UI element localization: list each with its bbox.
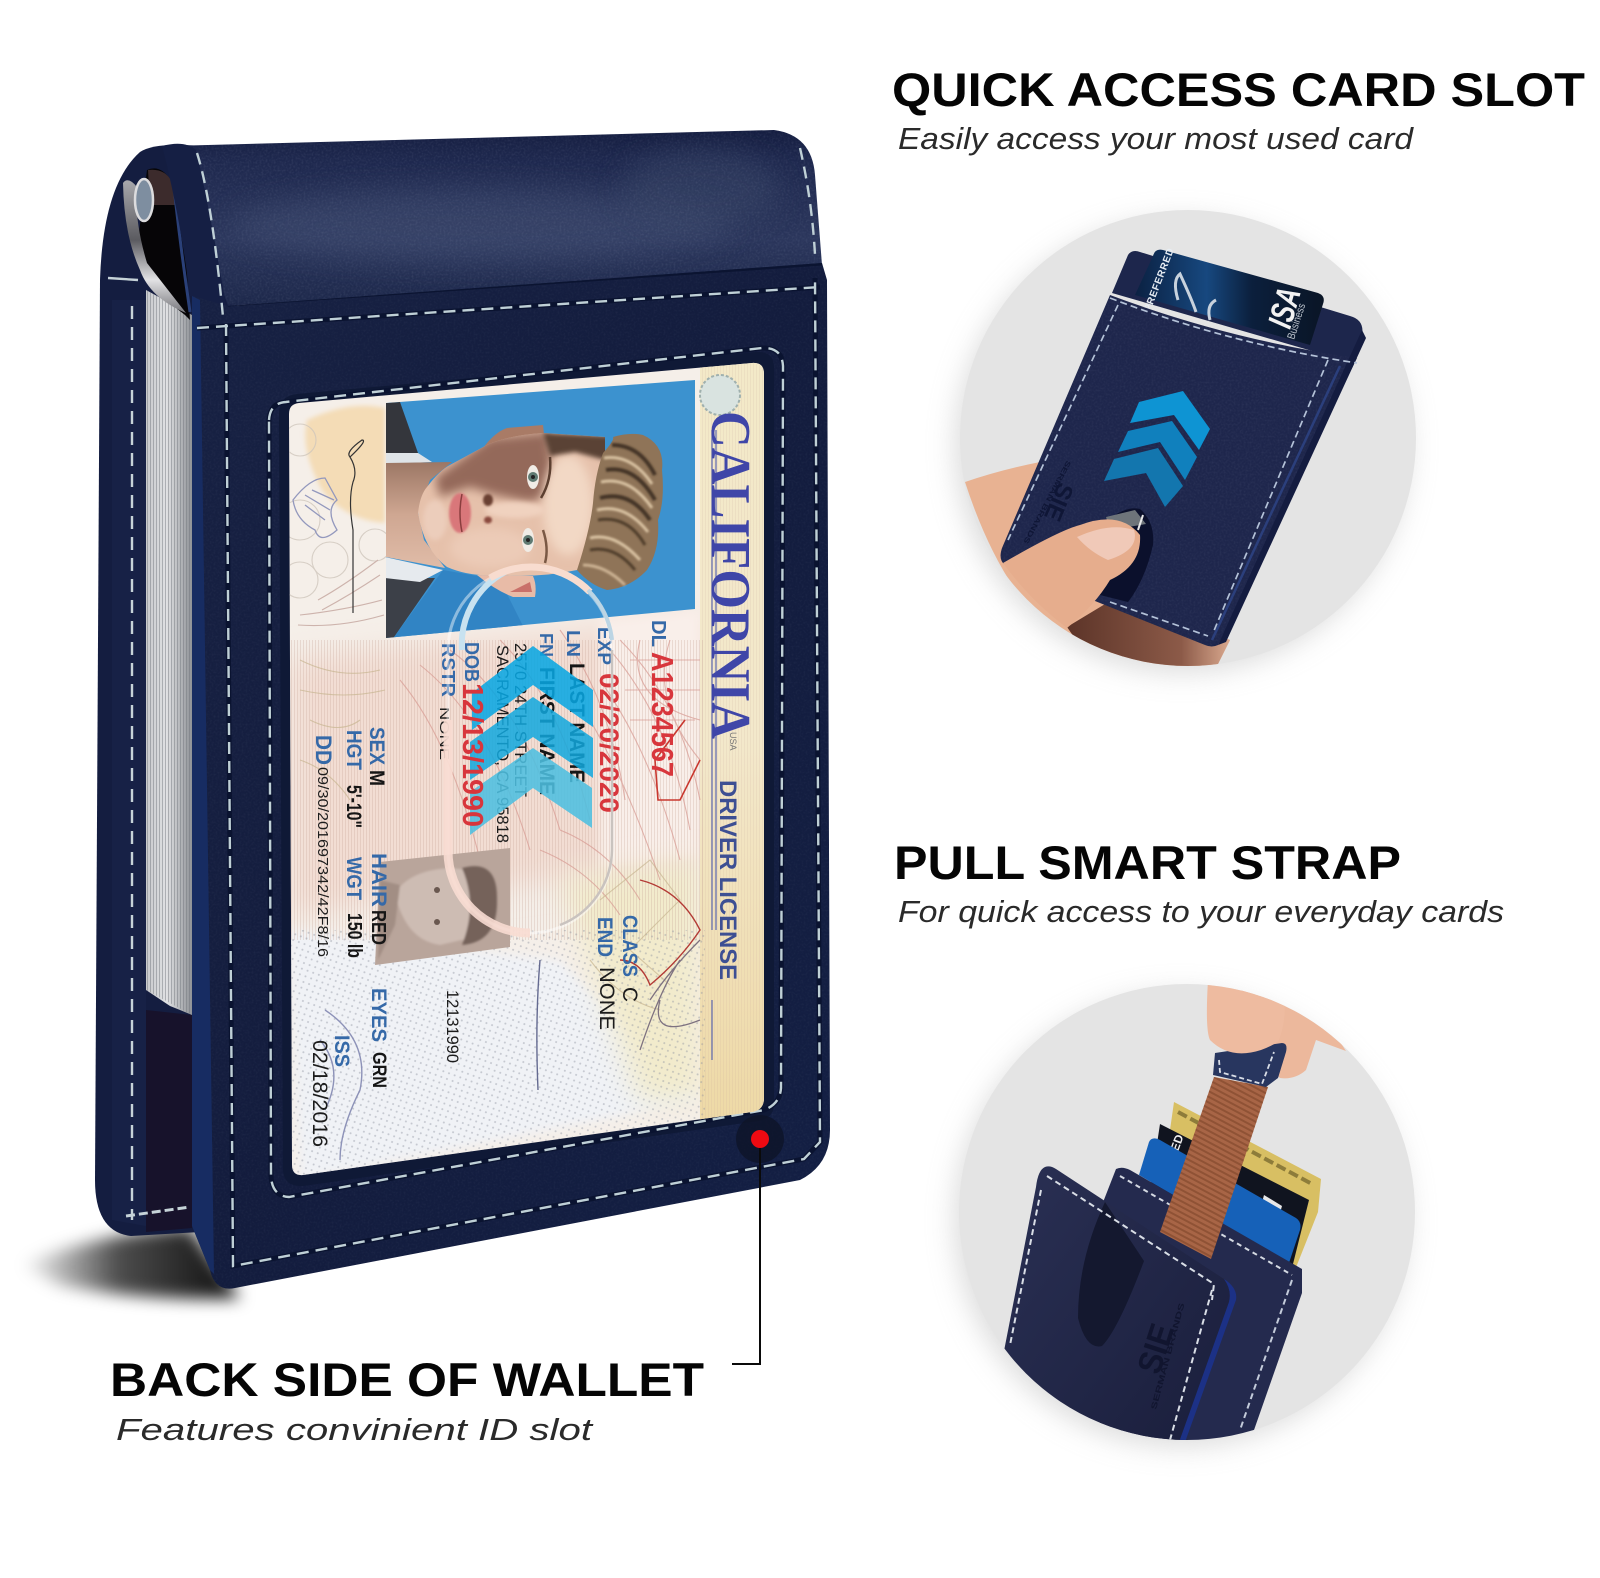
card printed text: GRN (368, 1052, 389, 1088)
card printed text: HAIR (367, 853, 390, 907)
main wallet photo: back side (20, 120, 840, 1299)
card printed text: C (618, 987, 641, 1002)
card printed text: M (365, 770, 388, 786)
front panel (185, 255, 835, 1295)
card printed text: 5'-10" (342, 785, 365, 828)
card printed text: NONE (437, 707, 452, 760)
wallet pocket (1001, 295, 1357, 646)
wallet stitching (1008, 298, 1357, 636)
flap left fold (162, 144, 226, 306)
card printed text: END (593, 917, 616, 957)
banknote pages (146, 290, 192, 1015)
callout marker and leader line (732, 1115, 784, 1364)
card printed text: EYES (367, 988, 390, 1042)
finger slot (1078, 1202, 1144, 1346)
portrait photo (380, 375, 700, 645)
circle photo: pull smart strap (955, 980, 1415, 1470)
card printed text: LAST NAME (565, 663, 588, 783)
red values over chevrons: 02/20/2020 (594, 673, 624, 813)
wallet front panel (1004, 1166, 1230, 1470)
wallet spine and rear panel (95, 145, 240, 1236)
red values over chevrons (456, 673, 624, 827)
facial features (449, 457, 550, 563)
clothing (386, 402, 418, 453)
protruding credit card (1135, 247, 1324, 345)
protruding credit card: Business (1285, 302, 1308, 341)
front panel blue left edge (192, 296, 214, 1274)
wallet rear panel (1112, 251, 1362, 362)
card printed text: FN (536, 633, 556, 657)
window recess (279, 352, 774, 1186)
brand emboss (1021, 459, 1078, 545)
card printed text: 09/30/201697342/42F8/16 (314, 767, 331, 957)
ID card in window (280, 355, 770, 1180)
card printed text: 150 lb (343, 913, 365, 958)
chevrons showing through the card (470, 646, 593, 835)
cards in wallet: ED (1168, 1132, 1187, 1153)
thumb over tab (1207, 980, 1285, 1053)
card printed text: NONE (595, 967, 618, 1030)
card printed text: USA (728, 732, 738, 751)
subtitle: quick access: Easily access your most used card (898, 121, 1415, 156)
brown strap (1160, 1077, 1268, 1259)
stitching on front panel (197, 148, 820, 1266)
heading: quick access: QUICK ACCESS CARD SLOT (892, 63, 1585, 116)
card printed text: DOB (460, 642, 482, 682)
card printed text: CALIFORNIA (699, 411, 761, 739)
brand emboss: SERMAN BRANDS (1149, 1301, 1187, 1411)
card printed text: RSTR (438, 643, 458, 697)
protruding credit card: PREFERRED (1143, 247, 1177, 313)
seal (700, 375, 740, 415)
ghost portrait (375, 848, 510, 965)
subtitle: back side: Features convinient ID slot (116, 1412, 594, 1447)
brand emboss (1130, 1301, 1187, 1411)
protruding credit card: ISA (1261, 283, 1309, 332)
strap leather tab (1213, 1043, 1286, 1087)
card printed text: LN (563, 630, 583, 657)
card printed text: 2570 24TH STREET (511, 643, 530, 797)
ground shadow (20, 1228, 240, 1299)
card printed text: SEX (365, 727, 388, 765)
guilloche lines and map (280, 424, 716, 1160)
card printed text: ISS (330, 1035, 353, 1067)
index finger behind strap (1240, 980, 1346, 1078)
card printed text: HGT (342, 730, 365, 770)
spine stitching (108, 278, 190, 1220)
cards in wallet (1139, 1102, 1321, 1270)
card printed text: DD (311, 735, 336, 765)
card printed text: 02/18/2016 (308, 1040, 331, 1147)
card printed text: FIRST NAME (535, 667, 558, 795)
face skin and shadow (418, 433, 605, 576)
flap with grain (189, 130, 822, 306)
hand behind wallet (965, 462, 1230, 680)
hair (577, 434, 663, 590)
brand emboss: SERMAN BRANDS (1021, 459, 1071, 545)
chevron logo (1104, 391, 1210, 507)
brand emboss: SIE (1130, 1319, 1182, 1378)
card printed text: RED (367, 910, 389, 945)
circle shadow (955, 994, 1407, 1446)
circle shadow (956, 220, 1408, 672)
card printed text: CLASS (618, 915, 641, 977)
card printed text: SACRAMENTO, CA 95818 (493, 645, 512, 843)
card base colour fields (285, 355, 770, 1180)
heading: back side: BACK SIDE OF WALLET (110, 1353, 704, 1406)
neck (386, 462, 452, 568)
thumb (1003, 519, 1140, 628)
circle photo: quick access slot (956, 210, 1416, 690)
front stitching (1010, 1176, 1214, 1440)
card printed text: DRIVER LICENSE (714, 780, 741, 980)
money clip (123, 158, 190, 320)
red values over chevrons: 12/13/1990 (456, 683, 488, 827)
thumb notch with chip (1080, 508, 1153, 602)
heading: pull strap: PULL SMART STRAP (894, 836, 1401, 889)
card printed text: A1234567 (645, 652, 680, 777)
wallet spine edge (1218, 330, 1366, 645)
card printed text: 12131990 (443, 990, 462, 1063)
card printed text: DL (647, 620, 669, 647)
card printed text: WGT (342, 857, 365, 900)
subtitle: pull strap: For quick access to your everyday cards (898, 894, 1504, 929)
brand emboss: SIE (1038, 479, 1078, 525)
card printed text (308, 411, 761, 1147)
wallet rear panel (1100, 1168, 1302, 1470)
card printed text: EXP (593, 627, 614, 665)
transparent thumb ring (448, 567, 612, 933)
ears (483, 425, 544, 448)
